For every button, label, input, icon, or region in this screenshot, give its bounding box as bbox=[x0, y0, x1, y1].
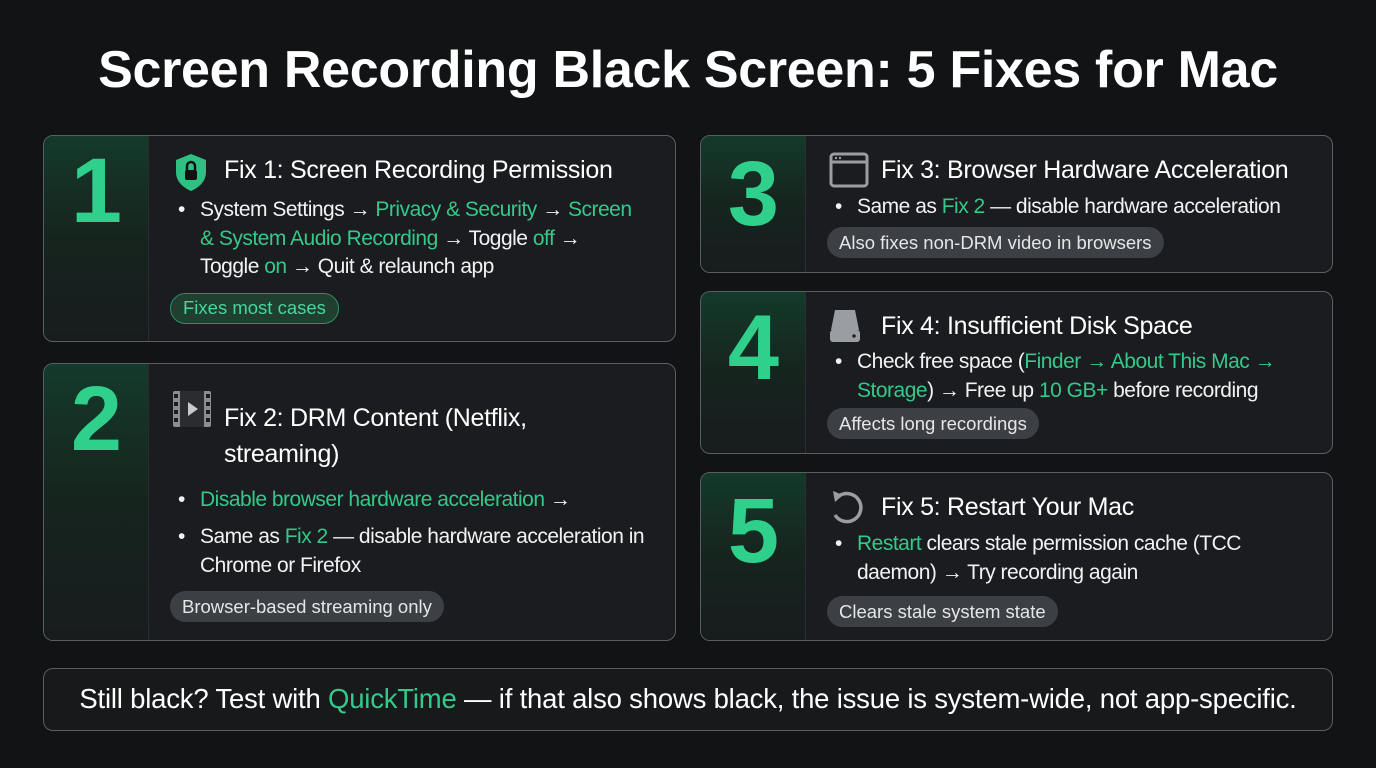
number 2: 2 bbox=[71, 368, 122, 470]
pill: Affects long recordings bbox=[839, 413, 1027, 434]
bullet 2: Same as Fix 2 — disable hardware acceleration in bbox=[200, 525, 644, 548]
bullet: • bbox=[835, 350, 842, 373]
heading: Fix 2: DRM Content (Netflix, streaming) bbox=[224, 404, 527, 468]
panel: fix 2 bbox=[43, 363, 676, 641]
bullet: • bbox=[835, 195, 842, 218]
title: Screen Recording Black Screen: 5 Fixes for Mac bbox=[98, 41, 1278, 99]
number 4 bbox=[701, 292, 806, 453]
number 4: 4 bbox=[728, 297, 779, 399]
pill bbox=[170, 293, 339, 324]
bullet 1: • bbox=[178, 488, 185, 511]
pill: Clears stale system state bbox=[839, 601, 1046, 622]
heading: Fix 3: Browser Hardware Acceleration bbox=[881, 156, 1288, 184]
bullet: Storage) → Free up 10 GB+ before recording bbox=[857, 378, 1258, 402]
pill bbox=[827, 408, 1039, 439]
panel: fix 5 bbox=[700, 472, 1333, 641]
icon: restart bbox=[833, 491, 863, 524]
panel: fix 4 bbox=[700, 291, 1333, 454]
number 2 bbox=[44, 364, 149, 640]
heading: Fix 4: Insufficient Disk Space bbox=[881, 312, 1193, 340]
footer callout: Still black? Test with QuickTime — if that also shows black, the issue is system-wide, not app-specific. bbox=[79, 683, 1297, 714]
icon: browser window bbox=[830, 152, 868, 188]
number 1: 1 bbox=[71, 140, 122, 242]
bullet text: System Settings → Privacy & Security → Screen bbox=[200, 198, 632, 221]
bullet 2: • bbox=[178, 525, 185, 548]
heading: Fix 5: Restart Your Mac bbox=[881, 493, 1134, 521]
pill bbox=[170, 591, 444, 622]
bullet: • bbox=[835, 532, 842, 555]
number 3 bbox=[701, 136, 806, 272]
pill bbox=[827, 227, 1164, 258]
pill: Also fixes non-DRM video in browsers bbox=[839, 232, 1152, 253]
heading: Fix 1: Screen Recording Permission bbox=[224, 156, 613, 184]
bullet bbox=[835, 532, 1241, 584]
panel: fix 1 bbox=[43, 135, 676, 342]
footer callout bbox=[43, 668, 1333, 731]
bullet 2: Chrome or Firefox bbox=[200, 554, 361, 576]
icon: disk bbox=[830, 310, 860, 342]
pill bbox=[827, 596, 1058, 627]
panel: fix 3 bbox=[700, 135, 1333, 273]
icon: shield lock bbox=[176, 154, 206, 191]
bullet text: Toggle on → Quit & relaunch app bbox=[200, 255, 494, 278]
bullet bbox=[835, 350, 1275, 402]
bullet: Same as Fix 2 — disable hardware acceleration bbox=[857, 195, 1280, 218]
bullet: Restart clears stale permission cache (TCC bbox=[857, 532, 1241, 555]
icon: film bbox=[173, 391, 211, 427]
bullet 1: Disable browser hardware acceleration → bbox=[200, 488, 570, 511]
bullet text: & System Audio Recording → Toggle off → bbox=[200, 226, 580, 250]
pill: Browser-based streaming only bbox=[182, 596, 432, 617]
number 5: 5 bbox=[728, 480, 779, 582]
number 5 bbox=[701, 473, 806, 640]
number 1 bbox=[44, 136, 149, 341]
bullet: daemon) → Try recording again bbox=[857, 560, 1138, 584]
number 3: 3 bbox=[728, 143, 779, 245]
bullet text bbox=[178, 198, 632, 278]
bullet: Check free space (Finder → About This Mac → bbox=[857, 350, 1275, 373]
bullet 2 bbox=[178, 525, 644, 576]
bullet text: • bbox=[178, 198, 185, 221]
pill: Fixes most cases bbox=[183, 297, 326, 318]
